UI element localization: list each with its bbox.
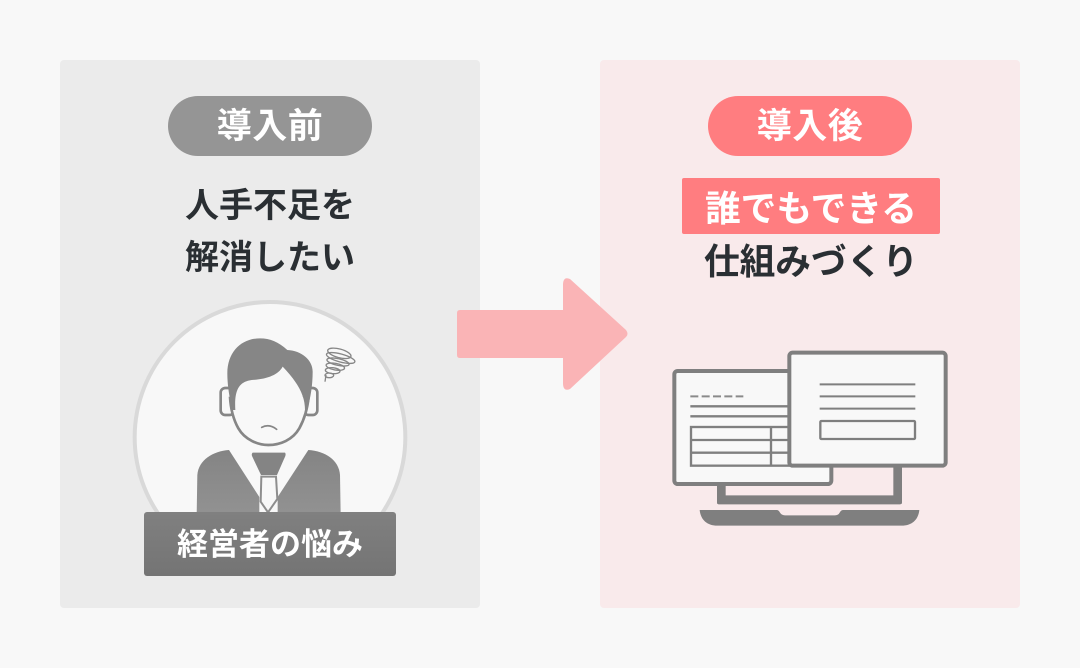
badge: before: 導入前 [217,107,323,146]
badge: before [168,96,372,156]
panel: after [600,60,1020,608]
label: manager's worries: 経営者の悩み [177,527,363,562]
highlighted heading [682,178,940,234]
arrow [457,278,628,390]
illustration: worried manager [132,300,408,512]
front window [789,353,946,466]
label: manager's worries [144,512,396,576]
heading: before [185,187,355,277]
monitor stand and laptop base [700,465,919,526]
heading: before: 人手不足を [185,187,355,225]
badge: after: 導入後 [757,107,863,146]
heading: after: 仕組みづくり [704,242,918,282]
badge: after [708,96,912,156]
panel: before [60,60,480,608]
illustration: computer screens [672,350,948,526]
highlighted heading: 誰でもできる [705,189,917,229]
heading: before: 解消したい [185,239,355,277]
back window [674,371,831,484]
